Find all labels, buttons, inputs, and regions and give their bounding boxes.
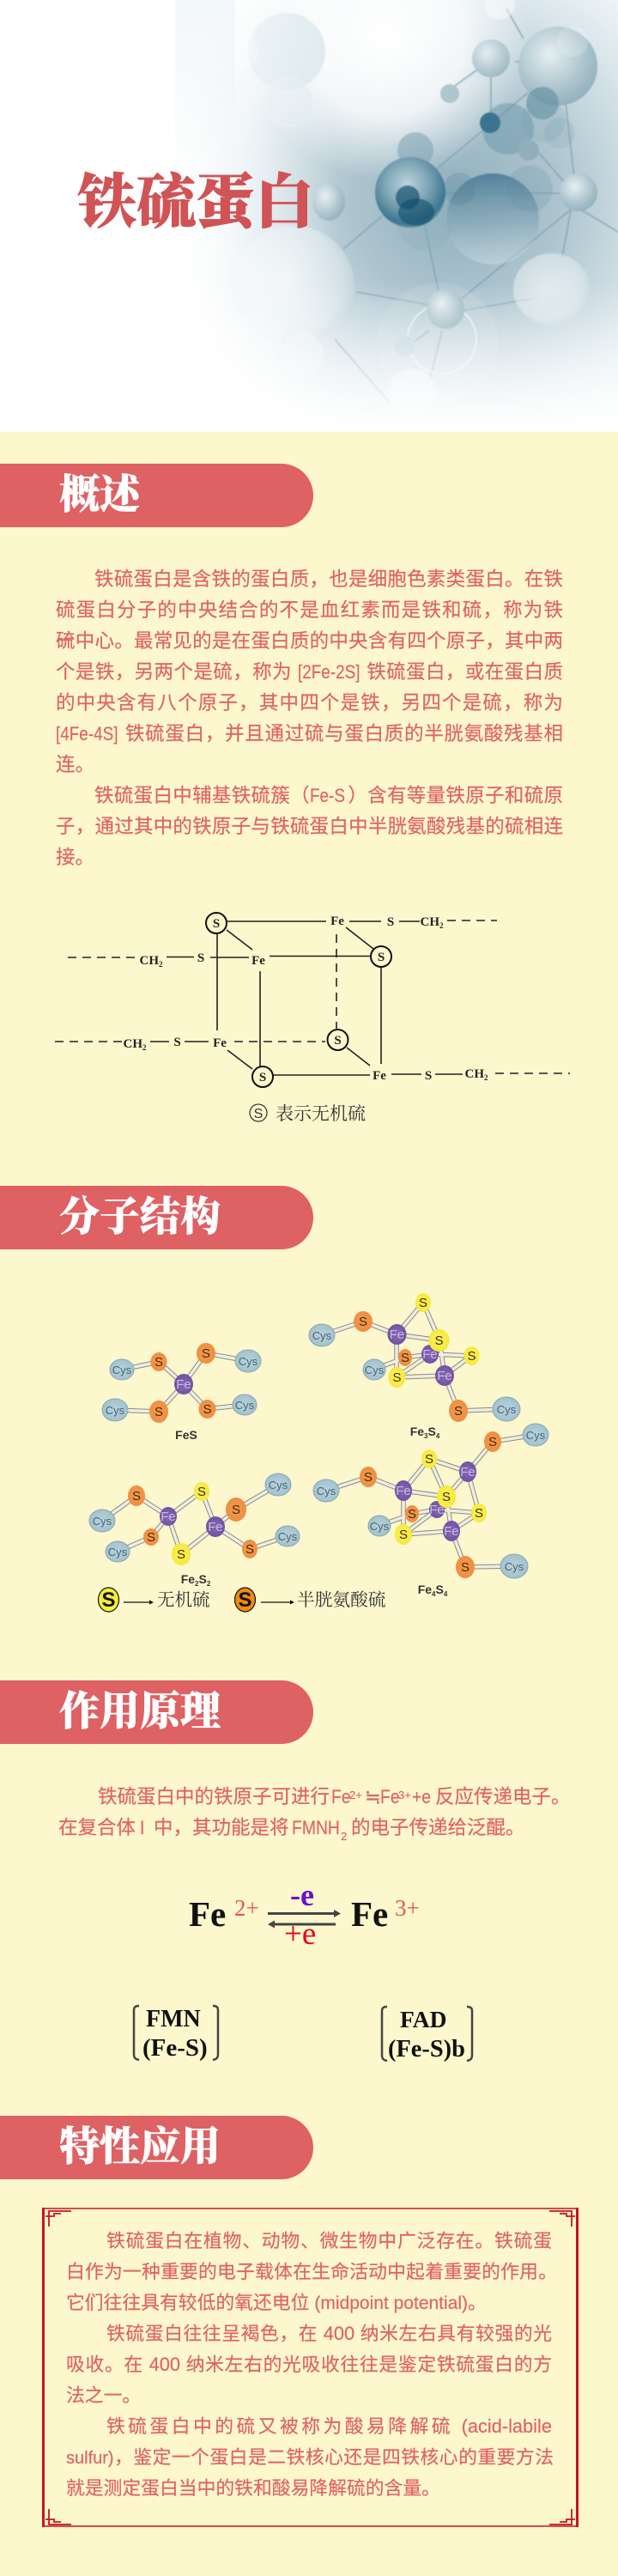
panel: ornamental frame [42,2208,579,2527]
molecule: Fe3S4: S [419,1296,427,1310]
molecule: Fe3S4: 4 [436,1432,440,1440]
chart: Fe-S cube structure diagram: 2 [439,921,444,930]
molecule: Fe3S4 [309,1293,520,1440]
text block: mechanism: Fe [380,1786,400,1807]
text block: mechanism: +e [412,1786,431,1807]
molecule: Fe3S4: Cys [497,1403,517,1416]
chart: Fe2+/Fe3+ redox equation: Fe [351,1894,388,1934]
chart: Fe-S cube structure diagram: 2 [142,1043,147,1052]
text block: mechanism: 在复合体 [58,1817,136,1838]
chart: Fe-S cube structure diagram: S [378,951,385,964]
header banner: molecule artwork [0,0,618,432]
molecule: Fe2S2: S [147,1530,155,1545]
text block: overview: 铁硫蛋白，并且通过硫与蛋白质的半胱氨酸残基相 [125,723,563,744]
chart: Fe-S cube structure diagram: Fe [373,1069,386,1083]
text block: overview: 铁硫蛋白中辅基铁硫簇（ ）含有等量铁原子和硫原 [94,785,563,806]
chart: Fe-S cube structure diagram: S [254,1107,263,1121]
molecule: Fe4S4: S [436,1583,444,1596]
heading: 作用原理 [0,1680,313,1744]
text block: overview: 硫蛋白分子的中央结合的不是血红素而是铁和硫，称为铁 － [56,599,563,652]
text block: mechanism: 2+ [349,1789,362,1801]
chart: Fe-S cube structure diagram: S [387,915,394,929]
legend: sulfur types: S [101,1589,116,1612]
legend: sulfur types: 无机硫 [157,1585,210,1611]
molecule: Fe3S4: S [467,1349,476,1364]
molecule: Fe3S4: S [427,1425,436,1438]
text block: mechanism: 中，其功能是将 [154,1817,289,1838]
molecule: Fe4S4: Fe [396,1484,411,1498]
text block: overview: 个是铁，另两个是硫，称为 铁硫蛋白，或在蛋白质 [56,661,563,683]
chart: Fe-S cube structure diagram: Fe [251,954,265,968]
text block: overview: Fe-S [310,785,345,806]
heading: 概述: 概述 [59,473,140,518]
molecule: Fe3S4: 3 [424,1432,428,1440]
molecule: FeS: S [203,1402,212,1417]
molecule: Fe2S2: Fe [181,1572,195,1586]
molecule: Fe4S4: Cys [505,1560,524,1573]
molecule: Fe3S4: Cys [365,1364,385,1376]
molecule: Fe4S4: S [364,1470,373,1485]
molecule: Fe4S4: S [475,1506,483,1521]
text block: overview: 连。 [56,754,94,775]
molecule: FeS: Cys [106,1404,125,1417]
heading: 概述 [0,464,313,527]
molecule: Fe2S2: Cys [93,1515,112,1528]
diagram: FMN (Fe-S) bracket [132,2004,220,2062]
text block: overview [56,568,563,868]
chart: Fe-S cube structure diagram: 2 [159,960,163,969]
chart: Fe-S cube structure diagram: S [213,917,220,931]
molecule: Fe2S2: S [245,1542,254,1557]
text block: mechanism: 的电子传递给泛醌。 [351,1817,525,1838]
text block: mechanism: FMNH [292,1817,340,1838]
text block: mechanism: I [140,1817,144,1838]
molecule: FeS: Cys [235,1399,255,1412]
chart: Fe2+/Fe3+ redox equation: +e [284,1917,316,1952]
molecule: Fe2S2: 2 [207,1580,211,1588]
molecule: Fe2S2: Cys [269,1479,288,1492]
molecule: Fe3S4: Cys [312,1329,332,1342]
molecule: Fe2S2: S [197,1485,206,1499]
molecule: Fe2S2: S [132,1489,141,1504]
molecule: Fe2S2: S [177,1547,185,1562]
molecule: Fe4S4: Cys [370,1520,390,1533]
molecule: Fe2S2: Fe [208,1520,223,1534]
molecule: FeS: FeS [175,1428,197,1442]
chart: Fe-S cube structure diagram: S [259,1071,266,1084]
text block: mechanism: 3+ [398,1789,411,1801]
text block: properties and applications: 法之一。 [66,2385,141,2406]
text block: properties and applications: 铁硫蛋白往往呈褐色，在 400 纳米左右具有较强的光 [106,2323,552,2344]
text block: properties and applications [66,2230,557,2499]
molecule: Fe4S4: Cys [317,1485,336,1498]
legend: sulfur types: 半胱氨酸硫 [297,1585,386,1611]
text block: overview: 接。 [56,847,94,868]
chart: Fe2+/Fe3+ redox equation: 3+ [395,1895,420,1921]
text block: mechanism: ≒ [365,1786,381,1807]
legend: sulfur types: S [238,1589,252,1612]
molecule: FeS: S [154,1355,163,1370]
chart: Fe-S cube structure diagram: S [197,951,204,965]
molecule: Fe2S2: S [232,1503,240,1517]
molecule: Fe4S4: Fe [460,1465,476,1479]
molecule: Fe4S4: S [488,1435,497,1449]
chart: Fe2+/Fe3+ redox equation: Fe [189,1894,226,1934]
title: 铁硫蛋白 [77,170,314,235]
text block: properties and applications: 就是测定蛋白当中的铁和酸易降解硫的含量。 [66,2477,440,2499]
text block: properties and applications: 白作为一种重要的电子载体在生命活动中起着重要的作用。 [66,2261,557,2282]
chart: Fe-S cube structure diagram: 表示无机硫 [276,1103,366,1124]
molecule: Fe4S4: 4 [444,1590,448,1598]
text block: overview: 铁硫蛋白是含铁的蛋白质，也是细胞色素类蛋白。在铁 [94,568,563,590]
text block: mechanism: 铁硫蛋白中的铁原子可进行 [98,1786,330,1807]
heading: 特性应用 [0,2116,313,2179]
chart: Fe-S cube structure diagram: CH [465,1067,484,1081]
molecule: Fe3S4: Fe [410,1425,424,1438]
text block: properties and applications: 它们往往具有较低的氧还电位 (midpoint potential)。 [66,2292,487,2313]
molecule: Fe4S4 [313,1424,548,1598]
chart: Fe-S cube structure diagram: CH [421,915,439,929]
chart: Fe-S cube structure diagram: S [425,1069,432,1083]
molecule: Fe4S4: Fe [429,1503,445,1517]
chart: Fe2+/Fe3+ redox equation: 2+ [234,1895,259,1921]
molecule: Fe4S4: S [461,1560,470,1575]
chart: Fe-S cube structure diagram: Fe [213,1036,227,1050]
heading: 分子结构 [0,1186,313,1249]
molecule: Fe4S4: S [408,1507,416,1522]
text block: mechanism: Fe [331,1786,351,1807]
text block: overview: 子，通过其中的铁原子与铁硫蛋白中半胱氨酸残基的硫相连 [56,816,563,837]
text block: overview: [4Fe-4S] [56,723,118,744]
molecule: Fe3S4: Fe [422,1347,438,1362]
text block: properties and applications: 铁硫蛋白中的硫又被称为酸易降解硫 (acid-labile [106,2415,552,2437]
molecule: Fe3S4: S [434,1334,444,1348]
chart: Fe2+/Fe3+ redox equation [189,1880,420,1952]
heading: 作用原理: 作用原理 [59,1690,221,1735]
molecule: Fe4S4: Fe [418,1583,432,1596]
text block: mechanism [58,1786,571,1843]
molecule: Fe3S4: S [454,1404,463,1419]
molecule: Fe4S4: 4 [432,1590,436,1598]
text block: overview: 的中央含有八个原子，其中四个是铁，另四个是硫，称为 [56,692,563,714]
text block: properties and applications: 铁硫蛋白在植物、动物、微生物中广泛存在。铁硫蛋 [106,2230,552,2251]
molecule: Fe4S4: Fe [444,1524,459,1539]
legend: sulfur types [98,1585,386,1612]
molecule: Fe2S2: 2 [195,1580,199,1588]
diagram: FAD (Fe-S)b bracket: (Fe-S)b [388,2036,465,2063]
molecule: Fe4S4: S [425,1452,433,1467]
molecule: FeS: Cys [239,1355,258,1368]
molecule: Fe2S2: Fe [161,1510,176,1524]
text block: mechanism: 反应传递电子。 [435,1786,571,1807]
molecule: FeS [102,1343,261,1442]
molecule: Fe2S2: Cys [108,1546,128,1558]
molecule: FeS: S [202,1346,210,1361]
heading: 特性应用: 特性应用 [59,2125,221,2170]
diagram: FMN (Fe-S) bracket: FMN [146,2006,201,2032]
chart: Fe-S cube structure diagram: CH [124,1037,142,1051]
chart: iron-sulfur cluster molecular models [89,1293,549,1613]
molecule: Fe2S2: S [199,1572,207,1586]
text block: overview: [2Fe-2S] [298,661,360,683]
molecule: FeS: Cys [112,1364,132,1376]
molecule: Fe4S4: Cys [526,1429,546,1442]
chart: Fe-S cube structure diagram: Fe [330,914,344,928]
molecule: Fe3S4: Fe [437,1369,452,1383]
text block: mechanism: 2 [341,1830,347,1843]
molecule: Fe3S4: S [359,1315,367,1329]
chart: Fe-S cube structure diagram: S [334,1034,342,1048]
molecule: Fe4S4: S [399,1528,408,1542]
molecule: Fe2S2 [89,1473,300,1588]
molecule: Fe4S4: S [442,1490,451,1504]
chart: Fe-S cube structure diagram [55,912,570,1124]
diagram: FAD (Fe-S)b bracket [381,2006,474,2063]
heading: 分子结构: 分子结构 [59,1195,221,1240]
chart: Fe-S cube structure diagram: S [173,1036,181,1049]
chart: Fe-S cube structure diagram: CH [139,954,159,968]
diagram: FMN (Fe-S) bracket: (Fe-S) [142,2034,208,2062]
text block: properties and applications: 吸收。在 400 纳米左右的光吸收往往是鉴定铁硫蛋白的方 [66,2354,552,2375]
chart: Fe-S cube structure diagram: 2 [484,1073,488,1082]
molecule: Fe3S4: Fe [390,1327,404,1342]
molecule: FeS: Fe [176,1377,191,1392]
diagram: FAD (Fe-S)b bracket: FAD [400,2006,446,2032]
text block: overview: 硫中心。最常见的是在蛋白质的中央含有四个原子，其中两 [56,630,563,652]
molecule: FeS: S [154,1405,163,1419]
molecule: Fe2S2: Cys [278,1530,298,1543]
molecule: Fe3S4: S [401,1351,409,1365]
molecule: Fe3S4: S [392,1370,402,1385]
text block: properties and applications: sulfur)，鉴定一个蛋白是二铁核心还是四铁核心的重要方法 [66,2446,554,2468]
